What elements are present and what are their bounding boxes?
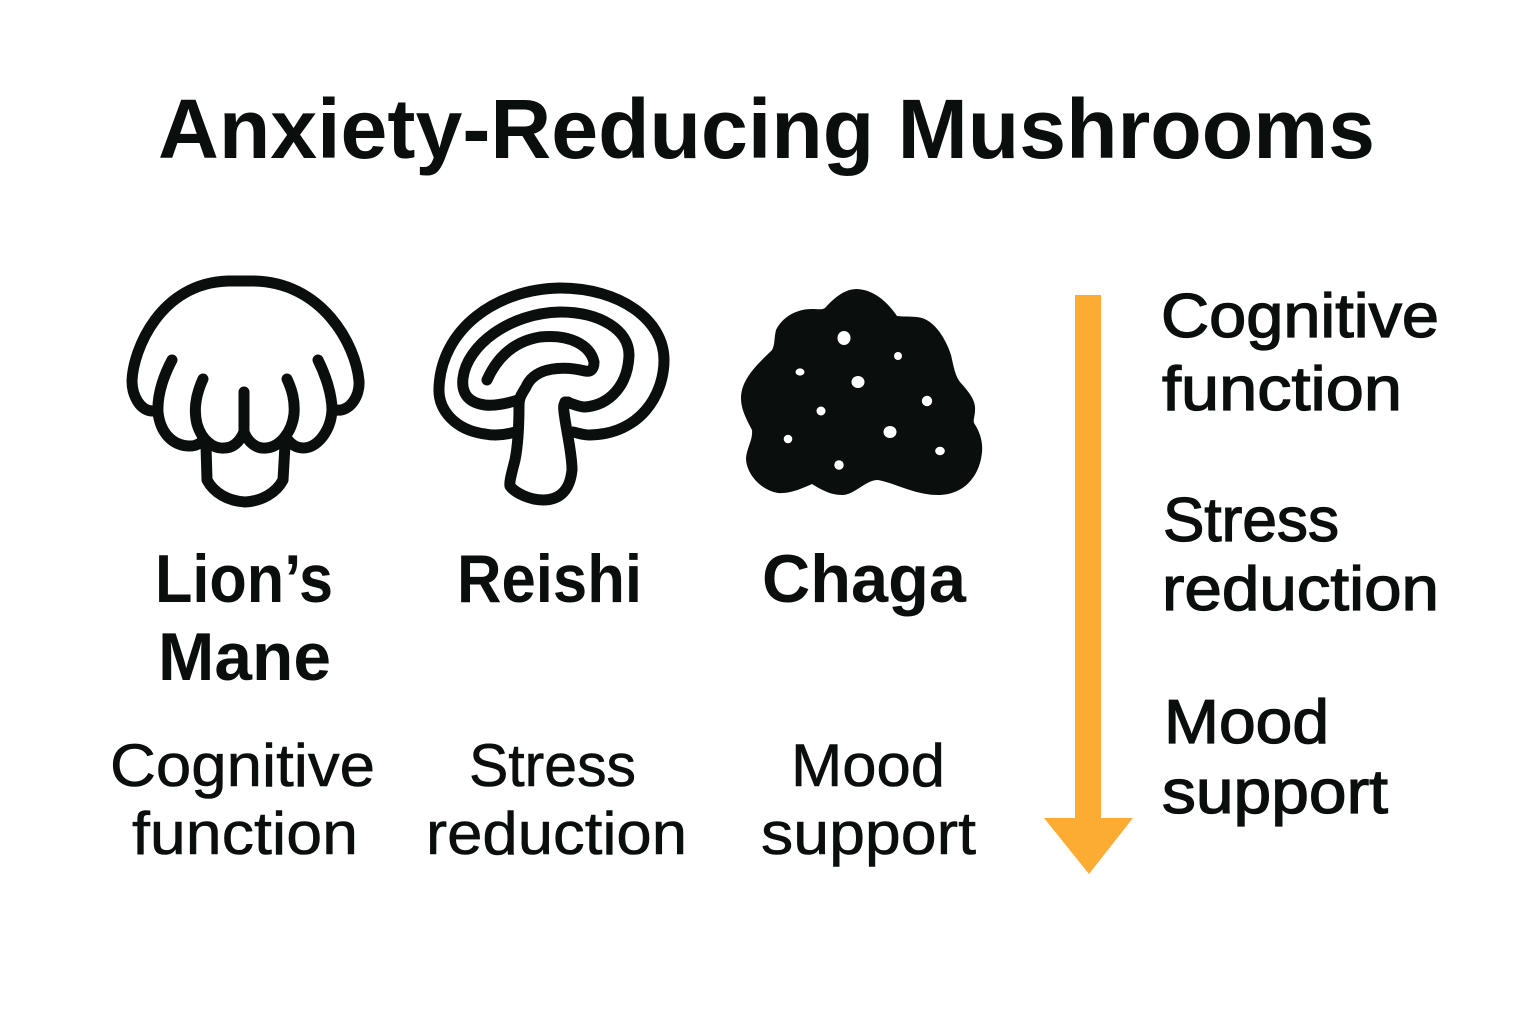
benefit: mood support xyxy=(761,732,976,867)
legend item: mood support: Mood xyxy=(1164,688,1329,757)
legend item: stress reduction: Stress xyxy=(1163,486,1339,555)
legend item: cognitive function: Cognitive xyxy=(1161,282,1439,351)
name: Reishi: Reishi xyxy=(457,541,642,617)
name: Chaga: Chaga xyxy=(762,541,967,617)
benefit: stress reduction: Stress xyxy=(469,732,636,799)
legend item: stress reduction xyxy=(1162,486,1439,624)
legend item: stress reduction: reduction xyxy=(1162,555,1439,624)
legend item: cognitive function xyxy=(1161,282,1439,424)
title: Anxiety-Reducing Mushrooms xyxy=(158,82,1375,176)
benefit: cognitive function xyxy=(110,732,375,867)
arrow: downward orange xyxy=(1044,295,1133,874)
legend item: mood support xyxy=(1162,688,1388,827)
legend: benefits list xyxy=(1161,282,1439,827)
benefit: mood support: support xyxy=(761,800,976,867)
benefit: mood support: Mood xyxy=(791,732,945,799)
legend item: cognitive function: function xyxy=(1162,355,1402,424)
benefit: cognitive function: Cognitive xyxy=(110,732,375,799)
panel: Lion's Mane xyxy=(110,281,375,867)
panel: Chaga xyxy=(741,289,982,867)
legend item: mood support: support xyxy=(1162,758,1388,827)
name: Lion's Mane: Mane xyxy=(158,619,331,695)
icon: Reishi mushroom xyxy=(439,288,664,500)
benefit: stress reduction xyxy=(426,732,687,867)
benefit: stress reduction: reduction xyxy=(426,800,687,867)
panel: Reishi xyxy=(426,288,687,867)
benefit: cognitive function: function xyxy=(132,800,358,867)
icon: Chaga mushroom xyxy=(741,289,982,495)
name: Lion's Mane: Lion’s xyxy=(155,541,333,617)
icon: Lion's Mane mushroom xyxy=(132,281,359,502)
name: Lion's Mane xyxy=(155,541,333,695)
